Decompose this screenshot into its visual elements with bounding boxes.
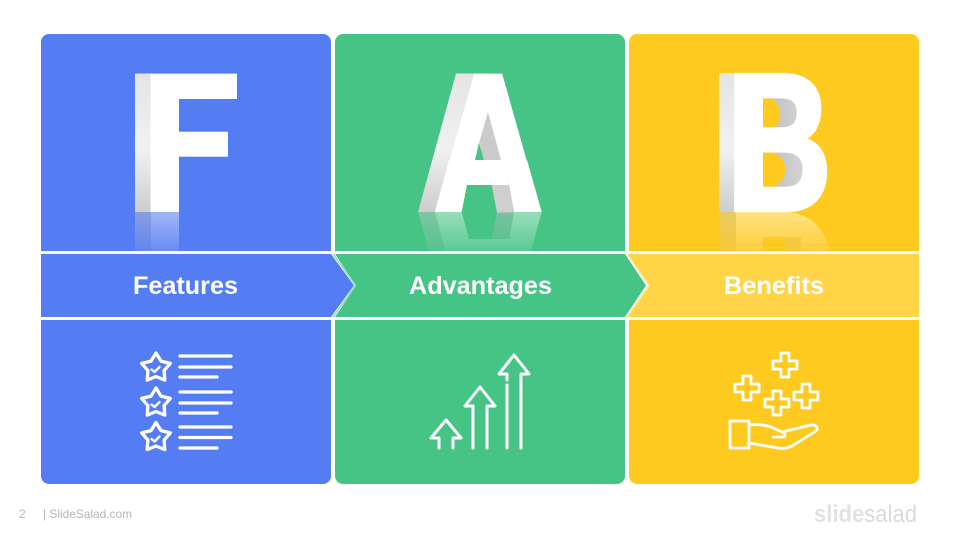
- advantages bottom panel: [335, 320, 625, 484]
- footer: page number and site: 2: [19, 507, 26, 521]
- chevron band: [41, 254, 919, 317]
- band: advantages: [335, 254, 646, 317]
- footer: slidesalad logo: slidesalad: [814, 501, 917, 528]
- band: advantages: Advantages: [409, 272, 552, 300]
- band: features: Features: [133, 272, 238, 300]
- benefits bottom panel: [629, 320, 919, 484]
- benefits top panel: [629, 34, 919, 251]
- icon: rising arrows: [431, 355, 529, 448]
- features top panel: [41, 34, 331, 251]
- icon: hand with plus signs: [730, 353, 818, 448]
- letter B reflection: [719, 212, 829, 251]
- letter B: B: [726, 32, 832, 252]
- band: benefits: Benefits: [724, 272, 824, 300]
- advantages top panel: [335, 34, 625, 251]
- panel: advantages: [335, 34, 625, 484]
- letter A: A: [433, 34, 543, 253]
- icon: star checklist: [142, 353, 231, 450]
- footer: page number and site: | SlideSalad.com: [43, 507, 132, 521]
- letter A reflection: [418, 212, 542, 251]
- letter F: F: [141, 34, 242, 252]
- panel: benefits: [629, 32, 919, 484]
- band: benefits: [627, 254, 919, 317]
- panel: features: [41, 34, 331, 484]
- letter F reflection: [135, 212, 179, 251]
- band: features: [41, 254, 356, 317]
- features bottom panel: [41, 320, 331, 484]
